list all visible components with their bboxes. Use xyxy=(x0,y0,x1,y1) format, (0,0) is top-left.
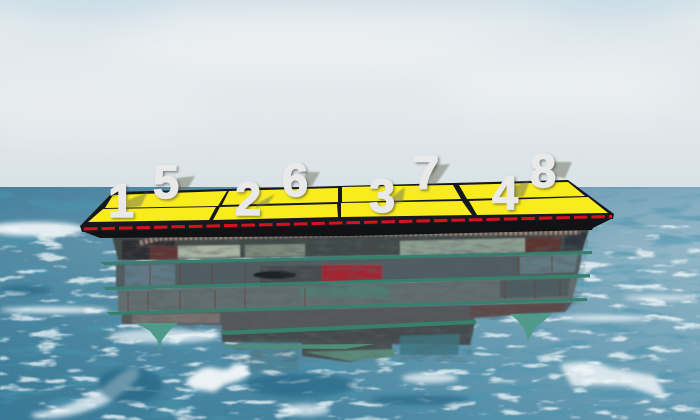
top storey xyxy=(112,226,590,260)
roof underside xyxy=(82,217,613,238)
yellow panel 3 xyxy=(341,201,472,217)
number shadows xyxy=(128,162,572,208)
second storey xyxy=(116,254,582,288)
number 3: 3 xyxy=(369,169,395,222)
yellow panel 1 xyxy=(88,207,216,222)
number 5: 5 xyxy=(153,155,179,208)
number 4: 4 xyxy=(492,166,518,219)
red sign xyxy=(322,265,382,282)
number 8: 8 xyxy=(530,144,556,197)
building texture xyxy=(112,226,592,362)
sky with clouds xyxy=(0,0,700,117)
yellow panel 8 xyxy=(459,182,585,199)
fourth storey xyxy=(122,302,573,333)
yellow panel 6 xyxy=(222,188,338,205)
pagoda corner left xyxy=(135,323,178,353)
roof xyxy=(80,180,614,232)
number 7: 7 xyxy=(413,146,439,199)
pagoda corner right xyxy=(510,313,553,341)
building reflected upside down xyxy=(100,226,592,372)
yellow panel 5 xyxy=(105,191,227,208)
dark swells xyxy=(0,285,470,405)
third storey xyxy=(118,277,578,312)
green eaves xyxy=(100,251,592,349)
foam patches xyxy=(0,222,696,418)
window posts xyxy=(128,255,560,311)
yellow panel 2 xyxy=(213,204,338,220)
number 6: 6 xyxy=(282,153,308,206)
yellow panel 4 xyxy=(469,197,608,215)
sea xyxy=(0,187,700,420)
number 1: 1 xyxy=(108,174,134,227)
yellow panel 7 xyxy=(342,185,461,202)
number 2: 2 xyxy=(235,172,261,225)
red dashed line xyxy=(84,216,612,229)
numbers xyxy=(108,144,556,227)
lower storeys xyxy=(222,322,475,345)
